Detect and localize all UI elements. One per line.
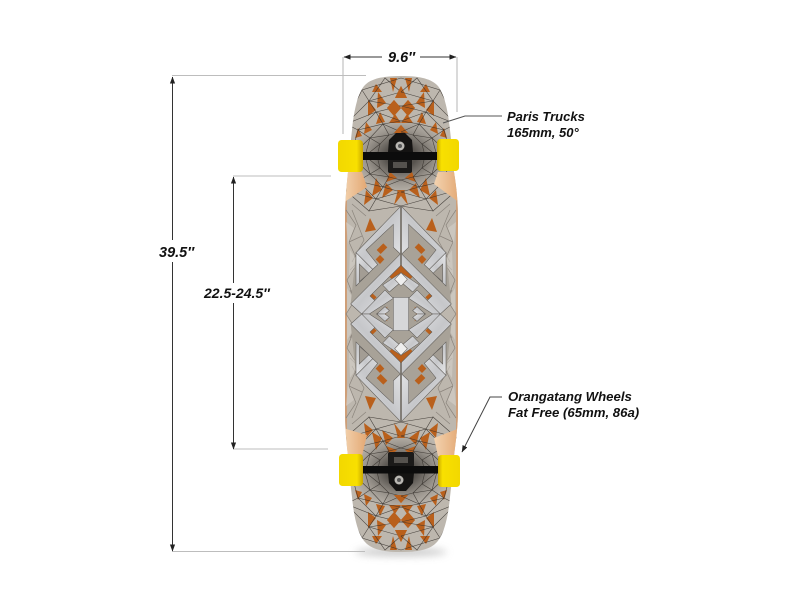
edge wood right bbox=[456, 200, 458, 430]
deck shadow bbox=[355, 548, 447, 556]
emblem centre bar bbox=[393, 297, 409, 331]
axle bbox=[360, 466, 440, 474]
kingpin nut bbox=[394, 476, 404, 484]
length label: 39.5″ bbox=[159, 245, 195, 261]
callout: trucks bbox=[443, 109, 585, 140]
baseplate bbox=[388, 452, 414, 467]
width label: 9.6″ bbox=[388, 50, 416, 66]
wood bottom left bbox=[346, 428, 367, 456]
bottom truck bbox=[360, 452, 440, 491]
bottom wheels bbox=[339, 454, 460, 487]
edge wood left bbox=[345, 200, 347, 430]
width dimension bbox=[343, 50, 457, 134]
top wheels bbox=[338, 139, 459, 172]
kingpin nut bbox=[396, 142, 404, 150]
silver diamond emblem bbox=[351, 207, 451, 421]
callout: wheels: Fat Free (65mm, 86a) bbox=[508, 405, 639, 420]
skateboard deck bbox=[345, 76, 458, 552]
wheelbase dimension bbox=[203, 176, 331, 449]
wood top right bbox=[434, 172, 458, 201]
callout: trucks: Paris Trucks bbox=[507, 109, 585, 124]
wood bottom right bbox=[434, 429, 457, 456]
top truck bbox=[360, 133, 439, 173]
callout: wheels: Orangatang Wheels bbox=[508, 389, 632, 404]
axle bbox=[360, 152, 439, 160]
emblem centre diamonds bbox=[395, 273, 407, 355]
wood top left bbox=[346, 172, 367, 202]
callout: trucks: 165mm, 50° bbox=[507, 125, 579, 140]
hanger bbox=[388, 473, 414, 491]
callout: wheels bbox=[462, 389, 639, 452]
wheelbase label: 22.5-24.5″ bbox=[203, 285, 271, 301]
baseplate bbox=[388, 158, 412, 173]
dark area bottom truck bbox=[358, 436, 444, 506]
mosaic pattern bbox=[345, 78, 457, 550]
hanger bbox=[388, 133, 413, 152]
overall length dimension bbox=[159, 76, 366, 552]
dark area top truck bbox=[358, 122, 444, 190]
